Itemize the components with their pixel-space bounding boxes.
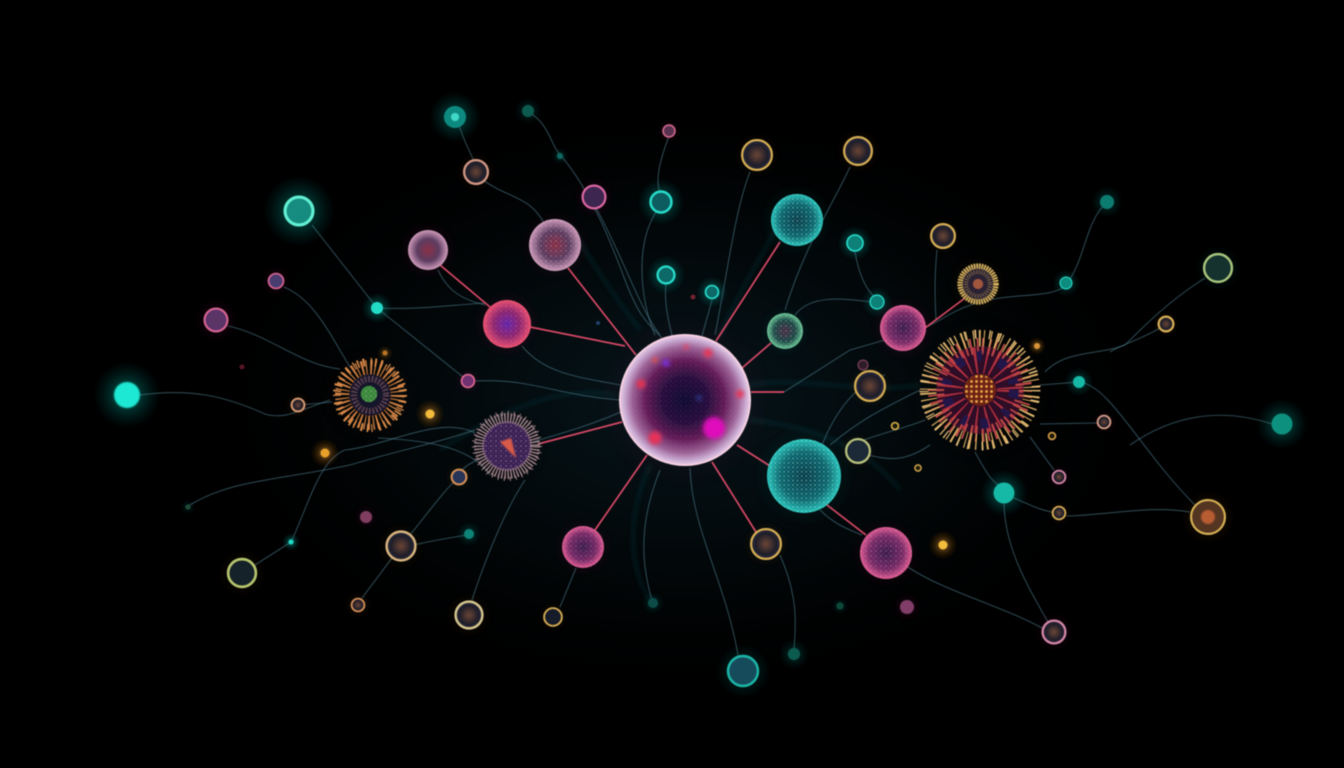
- soft radiating wires around core: [440, 225, 920, 600]
- sphere green: [758, 304, 812, 358]
- sphere pink lower: [553, 517, 613, 577]
- spiky cell yellow: [946, 252, 1010, 316]
- large spiky cell right: [904, 314, 1056, 466]
- sphere mauve: [519, 209, 591, 281]
- medium spheres: [398, 182, 936, 589]
- sphere red purple: [473, 290, 541, 358]
- sphere teal top: [759, 182, 835, 258]
- amber dots: [240, 294, 1056, 560]
- whole cell network: [93, 91, 1308, 699]
- spots inside core: [636, 344, 744, 444]
- connecting wires: [140, 113, 1272, 655]
- sphere pink right: [870, 295, 936, 361]
- sphere lavender: [398, 220, 458, 280]
- sphere teal large: [752, 424, 856, 528]
- red connectors: [440, 242, 965, 535]
- spiky cell orange: [318, 343, 422, 447]
- sphere pink lower right: [850, 517, 922, 589]
- glowing teal nodes: [93, 91, 1308, 699]
- central sphere: [595, 310, 775, 490]
- background glow: [180, 90, 1180, 710]
- ringed amber and pink nodes: [194, 119, 1242, 652]
- spiky cell grey purple: [463, 402, 551, 490]
